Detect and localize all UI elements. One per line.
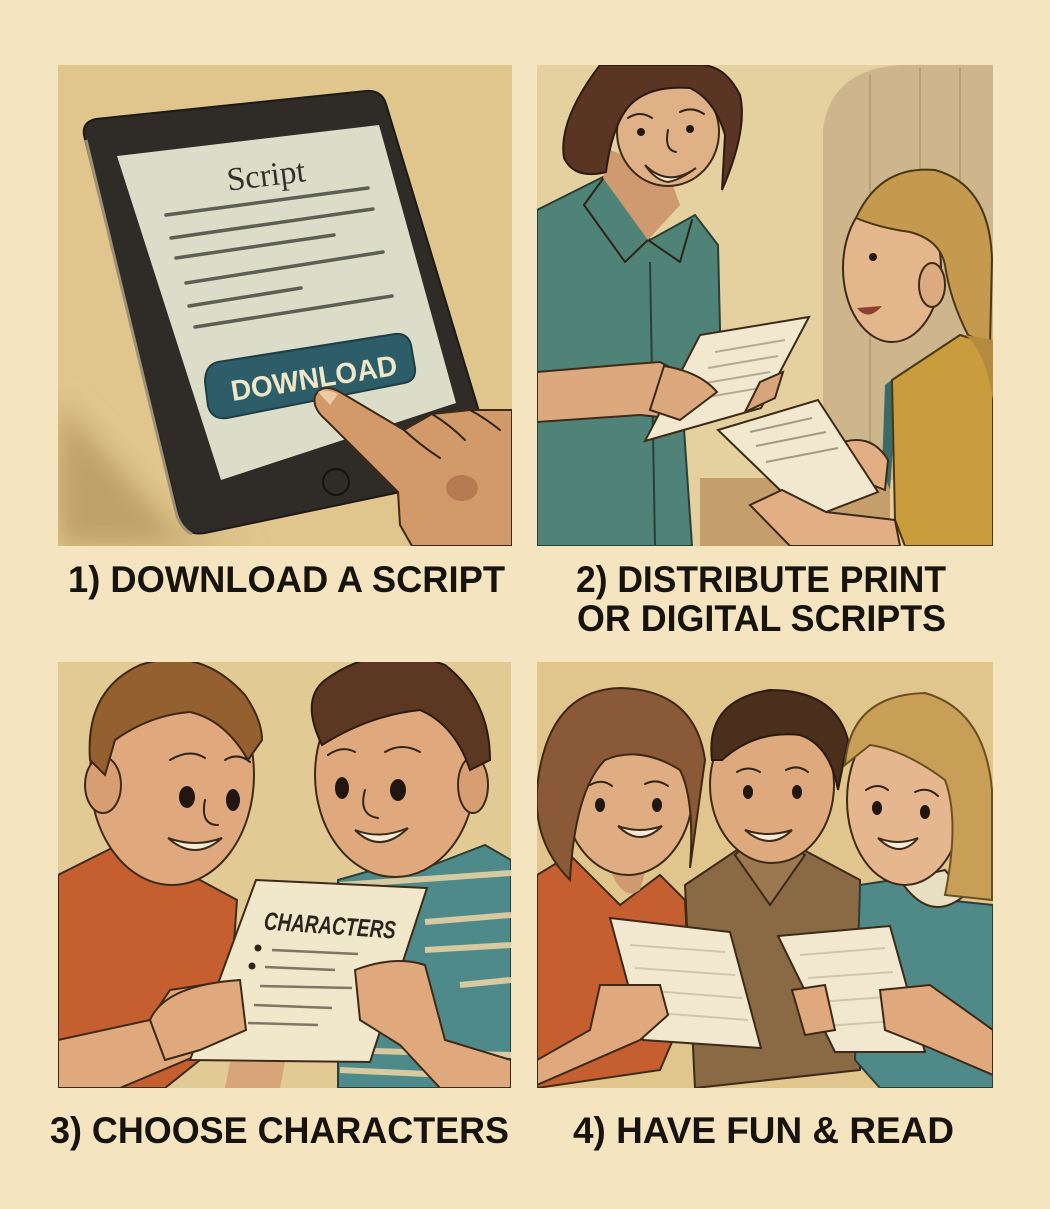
- figure: boy in brown shirt: [685, 690, 860, 1088]
- figure: blonde girl in teal: [845, 693, 993, 1088]
- figure: characters sheet: [190, 880, 427, 1062]
- panel: choose characters: [58, 655, 511, 1088]
- figure: left script: [610, 918, 761, 1048]
- caption: step 3: 3) CHOOSE CHARACTERS: [50, 1110, 509, 1151]
- figure: boy in striped shirt: [312, 655, 511, 1088]
- figure: girl with blonde hair: [835, 170, 993, 546]
- figure: script paper held by girl: [718, 400, 900, 546]
- hands holding sheet: [150, 961, 511, 1088]
- caption: step 2: 2) DISTRIBUTE PRINT: [576, 559, 946, 600]
- caption: step 1: 1) DOWNLOAD A SCRIPT: [68, 559, 505, 600]
- script lines: [166, 188, 392, 327]
- icon: hand pressing button: [314, 388, 512, 546]
- download button: [205, 334, 415, 418]
- text: characters: CHARACTERS: [263, 907, 397, 945]
- caption: step 2: OR DIGITAL SCRIPTS: [577, 598, 946, 639]
- figure: boy in orange shirt: [58, 659, 285, 1088]
- panel: download a script: [58, 65, 512, 546]
- panel: have fun and read: [537, 662, 993, 1088]
- figure: girl in orange: [537, 688, 705, 1088]
- caption: step 4: 4) HAVE FUN & READ: [573, 1110, 954, 1151]
- hands holding scripts: [537, 985, 993, 1085]
- text: script title: Script: [225, 153, 307, 199]
- figure: script paper held by woman: [645, 317, 809, 441]
- caption: step 2: [576, 559, 946, 639]
- icon: tablet: [84, 91, 479, 534]
- download button: DOWNLOAD: [229, 350, 400, 408]
- figure: right script: [778, 926, 925, 1052]
- panel: distribute scripts: [537, 65, 993, 546]
- figure: woman in green dress: [537, 65, 742, 546]
